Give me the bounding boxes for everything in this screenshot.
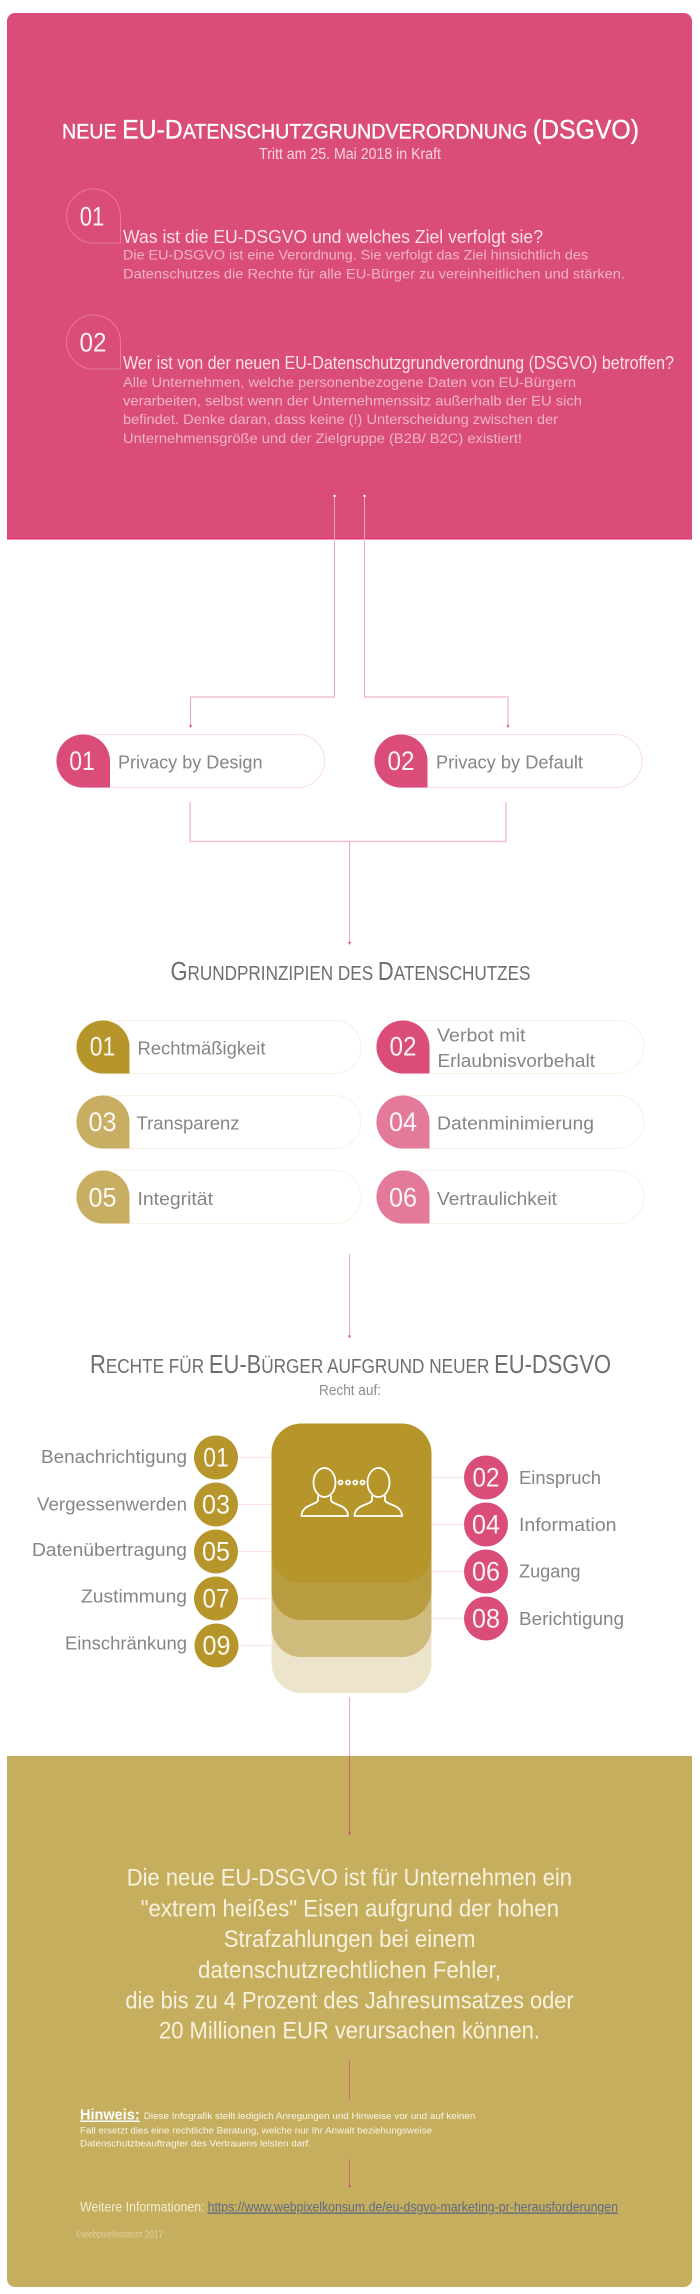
pill: privacy by design: 01: [69, 746, 95, 776]
right 06: [464, 1550, 580, 1594]
right 07: [81, 1576, 238, 1620]
right 02: Einspruch: [519, 1468, 601, 1488]
right 06: 06: [472, 1556, 500, 1586]
question 02 answer: befindet. Denke daran, dass keine (!) Unterscheidung zwischen der: [123, 412, 559, 427]
pill: privacy by default: Privacy by Default: [436, 752, 583, 772]
arrow: intro to privacy by design: [189, 495, 336, 728]
conclusion statement: Die neue EU-DSGVO ist für Unternehmen ein: [127, 1864, 572, 1892]
right 05: [32, 1530, 238, 1574]
right 04: 04: [472, 1510, 500, 1540]
rights right column: [464, 1456, 624, 1640]
panel: conclusion: [7, 1697, 692, 2287]
question 01 heading: Was ist die EU-DSGVO und welches Ziel verfolgt sie?: [123, 227, 543, 247]
note: hinweis: Hinweis:: [80, 2106, 140, 2124]
question 02 answer: verarbeiten, selbst wenn der Unternehmenssitz außerhalb der EU sich: [123, 394, 582, 408]
number bubble 01: 01: [80, 202, 104, 232]
principle 03: [76, 1096, 361, 1148]
right 05: 05: [202, 1536, 230, 1566]
note: hinweis: [80, 2106, 475, 2150]
right 08: Berichtigung: [519, 1609, 624, 1629]
further information link: Weitere Informationen:: [80, 2200, 204, 2214]
icon: two people talking: [302, 1468, 402, 1516]
principle 01: 01: [90, 1032, 115, 1062]
rights left column: [32, 1436, 238, 1668]
right 08: 08: [472, 1604, 500, 1634]
conclusion statement: Strafzahlungen bei einem: [224, 1926, 475, 1953]
pill: privacy by default: [374, 734, 642, 788]
right 09: 09: [202, 1630, 230, 1660]
principle 06: Vertraulichkeit: [437, 1189, 557, 1209]
principle 04: 04: [389, 1107, 417, 1137]
right 01: Benachrichtigung: [41, 1447, 187, 1467]
right 09: Einschränkung: [65, 1634, 187, 1654]
bracket connector: [190, 802, 506, 945]
question 02 answer: Unternehmensgröße und der Zielgruppe (B2B/ B2C) existiert!: [123, 431, 522, 446]
title: NEUE EU-DATENSCHUTZGRUNDVERORDNUNG (DSGVO): [62, 114, 639, 144]
number bubble 02: 02: [80, 328, 106, 358]
principle 05: Integrität: [138, 1189, 213, 1209]
question 01 answer: Datenschutzes die Rechte für alle EU-Bürger zu vereinheitlichen und stärken.: [123, 266, 625, 282]
arrow: rights to conclusion: [348, 1697, 351, 1836]
right 01: [41, 1436, 238, 1480]
question 01 answer: Die EU-DSGVO ist eine Verordnung. Sie verfolgt das Ziel hinsichtlich des: [123, 248, 588, 262]
note: hinweis: Diese Infografik stellt lediglich Anregungen und Hinweise vor und auf keinen: [144, 2111, 475, 2122]
principle 06: 06: [389, 1182, 417, 1212]
principle 02: [376, 1020, 644, 1074]
number bubble 02: [66, 315, 120, 369]
principle 05: [76, 1170, 361, 1224]
conclusion statement: 20 Millionen EUR verursachen können.: [159, 2018, 540, 2044]
principle 03: 03: [88, 1107, 116, 1137]
number bubble 01: [66, 189, 120, 243]
arrow: intro to privacy by default: [363, 495, 510, 728]
principle 03: Transparenz: [136, 1114, 240, 1134]
principle 01: [76, 1020, 361, 1074]
principle 02: Verbot mit: [437, 1026, 526, 1046]
right 03: Vergessenwerden: [37, 1494, 187, 1514]
pill: privacy by design: [56, 734, 324, 788]
principles grid: [76, 1020, 644, 1224]
panel: introduction: [7, 13, 692, 540]
conclusion statement: [125, 1864, 574, 2044]
pill: privacy by design: Privacy by Design: [118, 752, 262, 772]
right 01: 01: [203, 1442, 229, 1472]
principle 02: Erlaubnisvorbehalt: [438, 1051, 595, 1071]
note: hinweis: Fall ersetzt dies eine rechtliche Beratung, welche nur Ihr Anwalt beziehungsweise: [80, 2126, 432, 2136]
copyright: ©webpixelkonsum 2017: [76, 2230, 163, 2240]
principle 02: 02: [390, 1032, 416, 1062]
right 04: Information: [519, 1515, 616, 1535]
divider arrow with tip: [348, 2160, 351, 2188]
principle 01: Rechtmäßigkeit: [138, 1038, 266, 1058]
note: hinweis: Datenschutzbeauftragter des Vertrauens leisten darf.: [80, 2138, 311, 2150]
connector lines for rights: [238, 1458, 465, 1646]
conclusion statement: die bis zu 4 Prozent des Jahresumsatzes oder: [125, 1988, 574, 2014]
arrow: principles to rights: [348, 1254, 351, 1338]
right 05: Datenübertragung: [32, 1540, 187, 1560]
right 08: [464, 1596, 624, 1640]
stacked card with people icon: [272, 1424, 432, 1693]
right 07: 07: [202, 1584, 230, 1614]
right 09: [65, 1624, 238, 1668]
question 02: [66, 315, 674, 446]
principle 05: 05: [88, 1182, 116, 1212]
heading: rechte: RECHTE FÜR EU-BÜRGER AUFGRUND NEUER EU-DSGVO: [90, 1351, 611, 1379]
subtitle: Tritt am 25. Mai 2018 in Kraft: [259, 146, 442, 163]
question 01 answer: [123, 248, 625, 282]
question 01: [66, 189, 625, 282]
right 03: 03: [202, 1490, 230, 1520]
right 03: [37, 1482, 238, 1526]
right 06: Zugang: [519, 1562, 580, 1582]
pill: privacy by default: 02: [388, 746, 414, 776]
principle 06: [376, 1170, 644, 1224]
heading: grundprinzipien: GRUNDPRINZIPIEN DES DATENSCHUTZES: [170, 958, 530, 986]
principle 04: [376, 1096, 644, 1148]
question 02 answer: Alle Unternehmen, welche personenbezogene Daten von EU-Bürgern: [123, 375, 576, 390]
conclusion statement: "extrem heißes" Eisen aufgrund der hohen: [141, 1896, 559, 1922]
further information link: https://www.webpixelkonsum.de/eu-dsgvo-marketing-pr-herausforderungen: [208, 2200, 618, 2214]
right 02: [464, 1456, 601, 1500]
principle 04: Datenminimierung: [437, 1114, 594, 1134]
divider arrow: [348, 2060, 350, 2100]
right 04: [464, 1502, 616, 1546]
conclusion statement: datenschutzrechtlichen Fehler,: [198, 1957, 501, 1984]
right 07: Zustimmung: [81, 1586, 187, 1606]
right 02: 02: [472, 1462, 500, 1492]
question 02 answer: [123, 375, 582, 446]
subheading: recht auf: Recht auf:: [319, 1382, 381, 1399]
